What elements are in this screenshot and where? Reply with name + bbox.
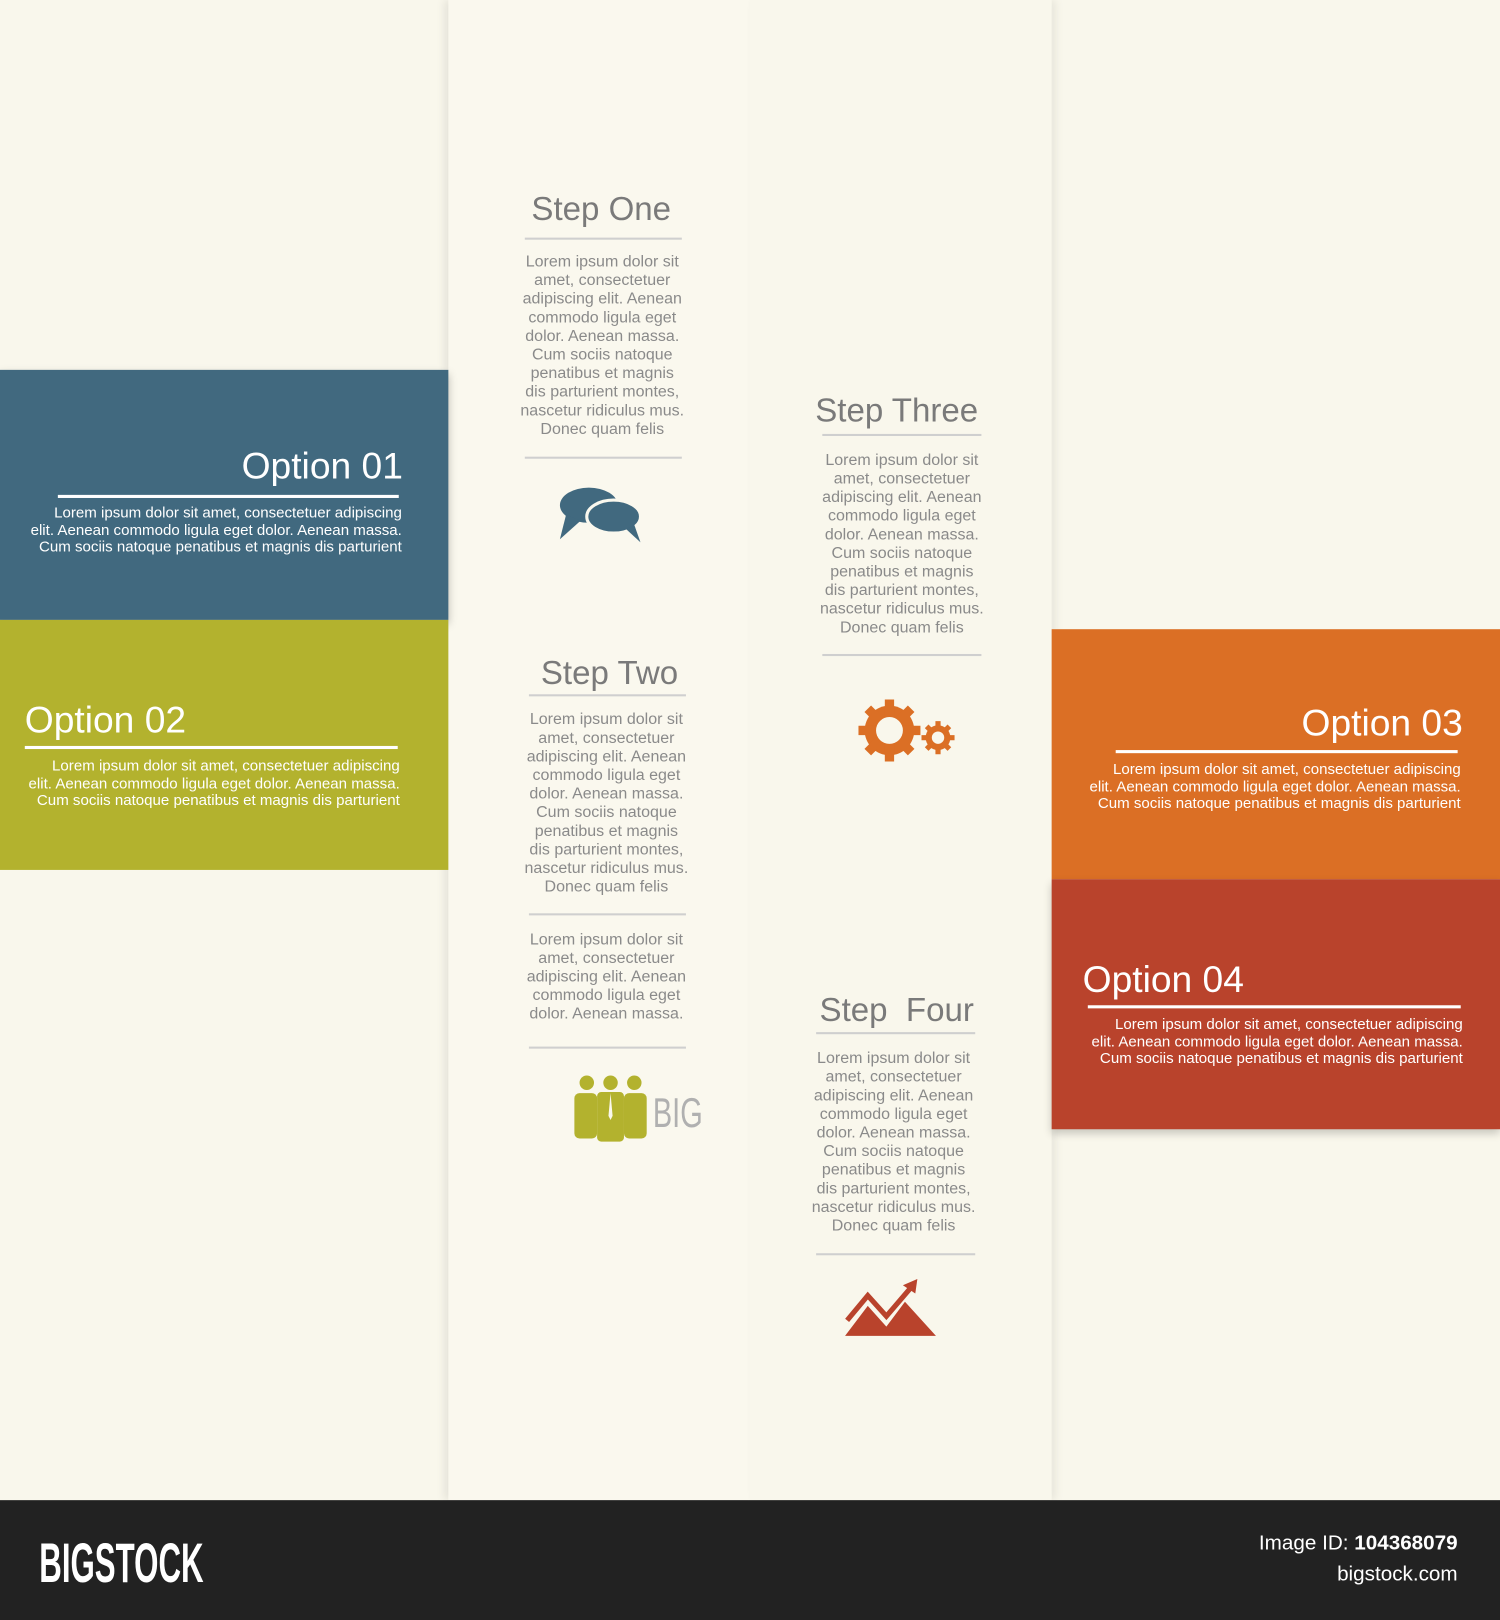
panel: option 04 bbox=[1052, 879, 1500, 1129]
text: option 02: Lorem ipsum dolor sit amet, consectetuer adipiscing bbox=[52, 758, 400, 775]
text: step two bbox=[525, 711, 688, 896]
text: step four: dis parturient montes, bbox=[817, 1180, 971, 1197]
heading: option 02: Option 02 bbox=[25, 698, 186, 741]
text: step four: Donec quam felis bbox=[832, 1217, 955, 1235]
text: step three: Donec quam felis bbox=[840, 619, 964, 636]
text: step one: Cum sociis natoque bbox=[532, 346, 673, 364]
column strip 2 bbox=[448, 0, 750, 1500]
text: step one: amet, consectetuer bbox=[534, 272, 670, 289]
text: step one: nascetur ridiculus mus. bbox=[520, 402, 684, 419]
heading: step one: Step One bbox=[531, 190, 671, 227]
text: option 03: elit. Aenean commodo ligula eget dolor. Aenean massa. bbox=[1089, 778, 1461, 795]
column strip 3 bbox=[750, 0, 1052, 1500]
heading: step three: Step Three bbox=[815, 392, 978, 429]
panel: option 01 bbox=[0, 370, 448, 620]
text: step four: amet, consectetuer bbox=[825, 1068, 962, 1086]
heading: option 04: Option 04 bbox=[1083, 958, 1244, 1000]
icon: chat bubbles bbox=[560, 488, 640, 542]
text: step three bbox=[820, 451, 984, 636]
heading: step two: Step Two bbox=[541, 654, 678, 691]
text: step two: Donec quam felis bbox=[545, 878, 668, 896]
text: step two extra: Lorem ipsum dolor sit bbox=[530, 931, 683, 948]
text: option 03: Lorem ipsum dolor sit amet, consectetuer adipiscing bbox=[1113, 761, 1461, 778]
text: option 03: Cum sociis natoque penatibus et magnis dis parturient bbox=[1098, 796, 1461, 812]
text: step three: dolor. Aenean massa. bbox=[825, 526, 979, 543]
heading: option 03: Option 03 bbox=[1302, 702, 1463, 744]
text: step two: penatibus et magnis bbox=[535, 822, 678, 840]
text: option 01: Lorem ipsum dolor sit amet, consectetuer adipiscing bbox=[54, 505, 402, 522]
text: option 01: elit. Aenean commodo ligula eget dolor. Aenean massa. bbox=[31, 522, 402, 539]
text: step one: dolor. Aenean massa. bbox=[525, 328, 679, 345]
text: option 01 bbox=[31, 505, 402, 556]
footer bbox=[0, 1500, 1500, 1620]
text: step one: adipiscing elit. Aenean bbox=[523, 290, 682, 308]
text: step two extra: dolor. Aenean massa. bbox=[529, 1005, 683, 1023]
panel: option 02 bbox=[0, 620, 448, 870]
text: step one: dis parturient montes, bbox=[525, 383, 679, 401]
text: step two: Lorem ipsum dolor sit bbox=[530, 711, 683, 728]
text: step four: penatibus et magnis bbox=[822, 1161, 965, 1179]
text: step four: Lorem ipsum dolor sit bbox=[817, 1050, 970, 1067]
text: step three: nascetur ridiculus mus. bbox=[820, 600, 984, 618]
text: step two extra: commodo ligula eget bbox=[533, 987, 680, 1004]
text: step one: penatibus et magnis bbox=[531, 365, 674, 382]
text: step one: commodo ligula eget bbox=[528, 309, 676, 326]
text: option 03 bbox=[1089, 761, 1461, 812]
icon: gears bbox=[858, 700, 955, 762]
heading: option 01: Option 01 bbox=[242, 444, 403, 487]
text: step two: adipiscing elit. Aenean bbox=[527, 748, 686, 766]
text: step four bbox=[812, 1050, 975, 1235]
text: step four: commodo ligula eget bbox=[820, 1105, 967, 1123]
text: step three: adipiscing elit. Aenean bbox=[822, 489, 982, 506]
icon: people bbox=[574, 1076, 647, 1142]
text: option 02 bbox=[29, 758, 400, 809]
text: step two: Cum sociis natoque bbox=[536, 804, 677, 821]
text: option 02: elit. Aenean commodo ligula eget dolor. Aenean massa. bbox=[29, 775, 400, 792]
text: step three: Cum sociis natoque bbox=[832, 544, 972, 562]
footer image id bbox=[1259, 1532, 1458, 1586]
footer image id: Image ID: 104368079 bbox=[1259, 1532, 1458, 1555]
panel: option 03 bbox=[1052, 629, 1500, 879]
text: step one: Donec quam felis bbox=[540, 420, 664, 438]
text: option 02: Cum sociis natoque penatibus et magnis dis parturient bbox=[37, 792, 400, 809]
text: step three: commodo ligula eget bbox=[828, 507, 976, 525]
text: option 04 bbox=[1092, 1017, 1463, 1067]
footer logo: BIGSTOCK bbox=[39, 1532, 204, 1594]
heading: step four: Step Four bbox=[820, 991, 974, 1028]
text: step three: penatibus et magnis bbox=[830, 563, 974, 581]
watermark text: BIG bbox=[653, 1091, 703, 1136]
icon: growth chart bbox=[845, 1279, 936, 1336]
text: step two: nascetur ridiculus mus. bbox=[525, 860, 688, 877]
text: option 04: Cum sociis natoque penatibus et magnis dis parturient bbox=[1100, 1051, 1463, 1067]
text: option 04: Lorem ipsum dolor sit amet, consectetuer adipiscing bbox=[1115, 1017, 1463, 1033]
text: step three: amet, consectetuer bbox=[834, 470, 970, 488]
text: step one: Lorem ipsum dolor sit bbox=[526, 253, 679, 271]
text: option 01: Cum sociis natoque penatibus et magnis dis parturient bbox=[39, 539, 402, 556]
text: step two: commodo ligula eget bbox=[533, 767, 680, 784]
text: step two extra: adipiscing elit. Aenean bbox=[527, 968, 686, 986]
text: option 04: elit. Aenean commodo ligula eget dolor. Aenean massa. bbox=[1092, 1034, 1463, 1050]
text: step four: Cum sociis natoque bbox=[823, 1143, 964, 1160]
text: step four: dolor. Aenean massa. bbox=[817, 1124, 971, 1142]
text: step four: nascetur ridiculus mus. bbox=[812, 1198, 975, 1216]
text: step four: adipiscing elit. Aenean bbox=[814, 1087, 973, 1104]
text: step two: dolor. Aenean massa. bbox=[529, 785, 683, 803]
text: step two extra: amet, consectetuer bbox=[538, 949, 674, 967]
text: step two extra bbox=[527, 931, 686, 1023]
footer image id: bigstock.com bbox=[1337, 1563, 1458, 1586]
text: step three: Lorem ipsum dolor sit bbox=[825, 451, 978, 469]
text: step one bbox=[520, 253, 684, 438]
text: step three: dis parturient montes, bbox=[825, 582, 979, 599]
text: step two: dis parturient montes, bbox=[529, 841, 683, 859]
text: step two: amet, consectetuer bbox=[538, 729, 674, 747]
